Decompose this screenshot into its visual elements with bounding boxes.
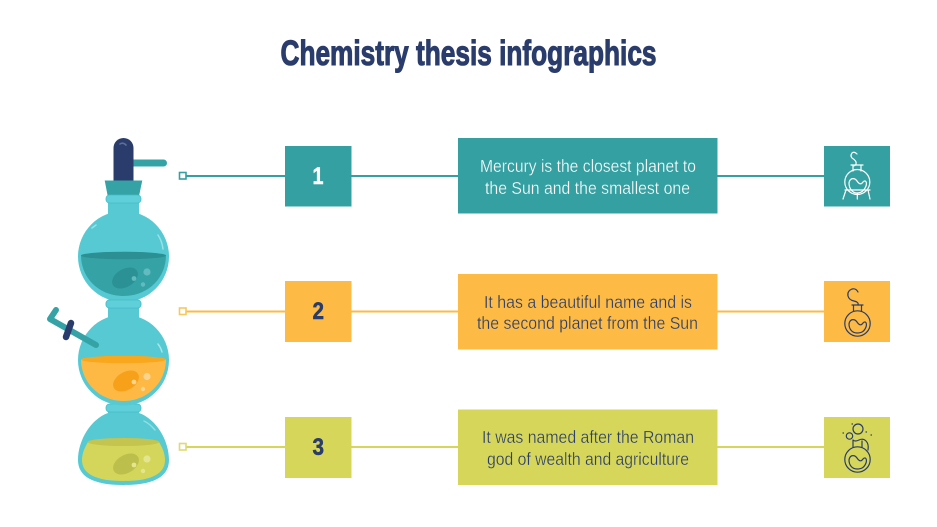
row 2	[180, 274, 890, 350]
text box 1: the Sun and the smallest one	[485, 178, 690, 198]
number box 3: 3	[312, 434, 324, 461]
icon box 3: flask with bubbles	[824, 417, 890, 478]
pump handle	[114, 138, 167, 182]
flask 3: yellow	[78, 404, 169, 485]
row 1	[180, 138, 890, 214]
flask 1: teal	[78, 195, 169, 308]
connector line 3	[180, 444, 824, 450]
number box 1	[285, 146, 352, 206]
text box 2: It has a beautiful name and is	[484, 292, 692, 312]
text box 2: the second planet from the Sun	[477, 313, 698, 333]
icon box 1: flask on stand	[824, 146, 890, 206]
text box 3: god of wealth and agriculture	[487, 449, 689, 469]
text box 3	[458, 410, 718, 485]
text box 2	[458, 274, 718, 350]
connector line 1	[180, 172, 824, 179]
text box 3: It was named after the Roman	[482, 427, 694, 447]
number box 1: 1	[312, 163, 324, 190]
side tube with clamp	[50, 310, 96, 345]
icon box 2: round flask	[824, 281, 890, 342]
text box 1: Mercury is the closest planet to	[480, 156, 696, 176]
illustration: stacked flasks	[50, 138, 169, 485]
number box 2	[285, 281, 352, 342]
text box 1	[458, 138, 718, 214]
flask 2: orange	[78, 300, 169, 406]
number box 3	[285, 417, 352, 478]
title: Chemistry thesis infographics	[280, 33, 656, 73]
connector line 2	[180, 308, 824, 314]
stopper	[105, 180, 142, 196]
row 3	[180, 410, 890, 485]
number box 2: 2	[312, 298, 324, 325]
